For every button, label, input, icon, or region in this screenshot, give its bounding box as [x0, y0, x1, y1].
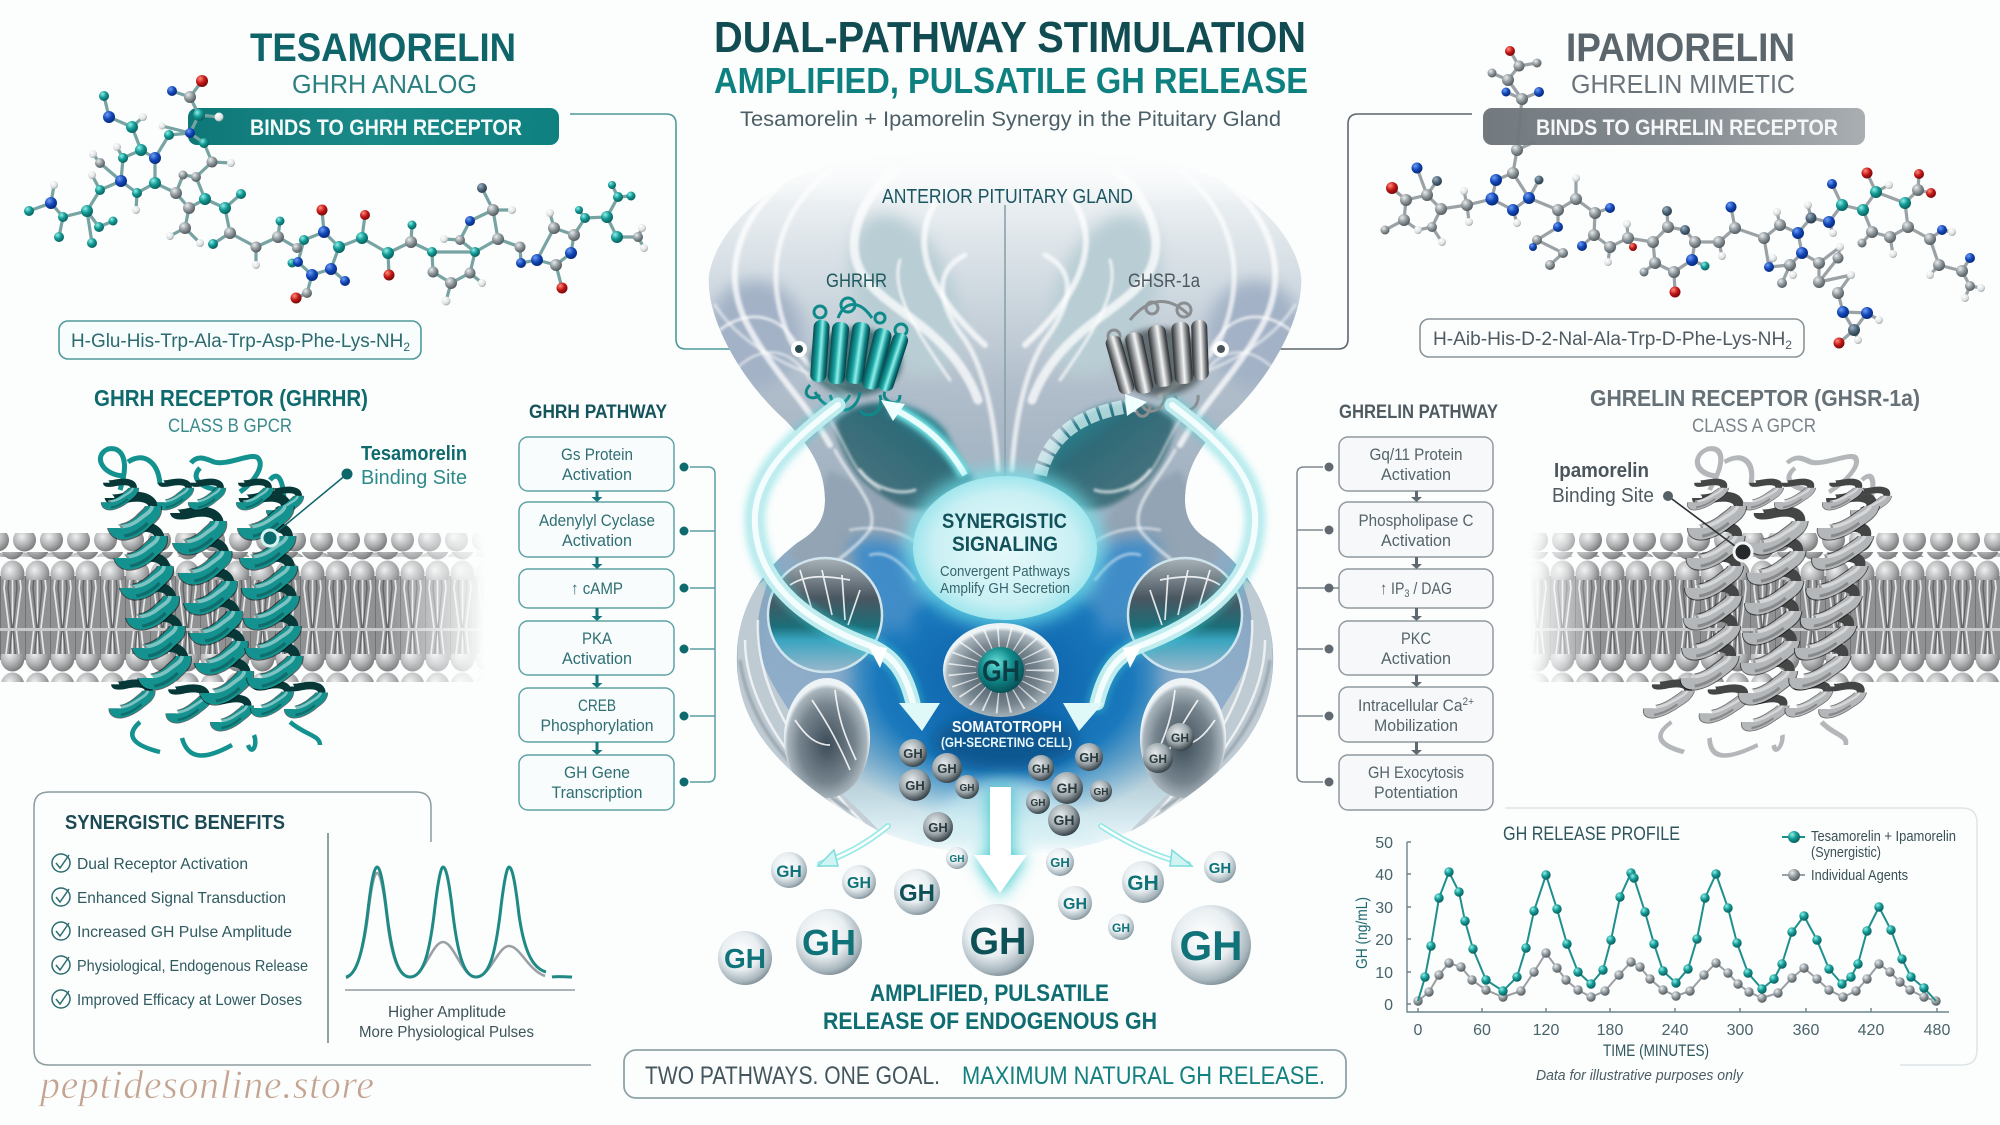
binds pill: BINDS TO GHRH RECEPTOR — [250, 115, 522, 140]
arrow: central release — [974, 787, 1027, 897]
heading: GHRH receptor: CLASS B GPCR — [168, 416, 292, 437]
y axis labels: 10 — [1375, 965, 1393, 982]
y axis labels: 30 — [1375, 900, 1393, 917]
legend — [1782, 828, 1956, 884]
x axis labels — [1414, 1022, 1950, 1039]
panel frame — [34, 792, 591, 1065]
ipamorelin name: IPAMORELIN — [1566, 26, 1795, 70]
legend: (Synergistic) — [1811, 844, 1881, 861]
heading: amplified release: AMPLIFIED, PULSATILE — [870, 980, 1109, 1007]
pathway labels: Activation — [1381, 531, 1451, 550]
panel: ipamorelin header — [1483, 26, 1865, 145]
benefits checklist: Improved Efficacy at Lower Doses — [77, 992, 302, 1009]
pathway labels: Gs Protein — [561, 445, 633, 464]
GH granules: inside gland: GH — [1056, 780, 1078, 796]
binds pill — [1483, 108, 1865, 145]
series: individual agents — [1413, 948, 1941, 1006]
GH granules: inside gland: GH — [1030, 798, 1046, 809]
GH granules: released: GH — [847, 875, 871, 892]
panel: tesamorelin header — [188, 26, 559, 145]
heading: ghrelin receptor — [1590, 385, 1920, 437]
pathway title: GHRELIN PATHWAY — [1339, 402, 1498, 423]
panel: ghrelin pathway — [1297, 402, 1498, 810]
pathway labels: ↑ cAMP — [571, 579, 623, 598]
pathway labels: 3 — [1404, 588, 1410, 600]
GH granules: released: GH — [1050, 855, 1070, 870]
heading: GHRH receptor: GHRH RECEPTOR (GHRHR) — [94, 385, 368, 411]
GH granules: released: GH — [776, 862, 802, 881]
chart panel — [1505, 808, 1977, 1065]
chart: GH release profile — [1354, 808, 1977, 1084]
GH granules: inside gland: GH — [1149, 752, 1167, 766]
marker: GHSR dot — [1215, 343, 1227, 355]
pulse caption: Higher Amplitude — [388, 1004, 506, 1021]
x axis labels: 120 — [1533, 1022, 1559, 1039]
legend: Tesamorelin + Ipamorelin — [1811, 828, 1956, 845]
x axis title: TIME (MINUTES) — [1603, 1041, 1709, 1060]
arrow: right signaling ring — [1097, 405, 1255, 703]
panel: GHRH pathway — [519, 402, 715, 810]
pathway labels — [539, 445, 655, 802]
divider — [327, 833, 329, 1043]
arrow: left splay — [818, 826, 888, 866]
membrane: left — [0, 533, 485, 682]
cell: somatotroph — [941, 623, 1072, 750]
pathway labels: Potentiation — [1374, 783, 1458, 802]
callout: ipamorelin binding site: Binding Site — [1552, 485, 1654, 507]
connector: tesamorelin to GHRHR — [570, 114, 790, 349]
callout: synergistic signaling — [905, 468, 1105, 628]
chart note: Data for illustrative purposes only — [1536, 1067, 1744, 1084]
x axis labels: 180 — [1597, 1022, 1623, 1039]
GH granules: inside gland: GH — [937, 761, 957, 776]
pathway labels: PKA — [582, 629, 613, 648]
x axis labels: 480 — [1924, 1022, 1950, 1039]
sequence: ipamorelin — [1420, 319, 1804, 357]
heading: amplified release — [823, 980, 1157, 1035]
y axis labels: 50 — [1375, 835, 1393, 852]
arrow: left signaling ring — [755, 405, 913, 703]
pathway labels: PKC — [1401, 629, 1431, 648]
title line 2: AMPLIFIED, PULSATILE GH RELEASE — [714, 60, 1308, 101]
GH granules: released: GH — [970, 921, 1026, 963]
GH granules: released: GH — [1127, 872, 1159, 895]
molecule: ipamorelin — [1380, 46, 1985, 348]
pulse chart — [345, 867, 575, 990]
benefits checklist — [52, 854, 308, 1009]
cell: somatotroph: GH — [982, 655, 1020, 688]
pathway labels: Adenylyl Cyclase — [539, 511, 655, 530]
benefits heading: SYNERGISTIC BENEFITS — [65, 812, 285, 834]
pathway labels: 2+ — [1463, 696, 1474, 708]
GH granules: released: GH — [1063, 896, 1087, 913]
dots — [1324, 462, 1334, 786]
banner: two pathways: MAXIMUM NATURAL GH RELEASE. — [962, 1062, 1325, 1090]
pathway labels: Phosphorylation — [540, 716, 654, 735]
callout: tesamorelin binding site — [262, 443, 467, 546]
GH granules: inside gland: GH — [1079, 750, 1099, 765]
GH granules: inside gland: GH — [1032, 762, 1050, 776]
tesamorelin class: GHRH ANALOG — [292, 69, 477, 99]
arrow: right splay — [1101, 826, 1192, 866]
bracket — [690, 467, 715, 782]
arrow: down arrowheads — [868, 645, 1142, 731]
marker: GHRHR dot — [793, 343, 805, 355]
bracket — [1297, 467, 1339, 782]
sequence: tesamorelin: H-Glu-His-Trp-Ala-Trp-Asp-Phe-Lys-NH — [71, 331, 405, 352]
GH granules: inside gland: GH — [905, 778, 925, 793]
benefits checklist: Dual Receptor Activation — [77, 856, 248, 873]
benefits checklist: Physiological, Endogenous Release — [77, 958, 308, 975]
illustration: pituitary gland — [708, 188, 1302, 851]
main title — [714, 13, 1308, 131]
callout: synergistic signaling: Convergent Pathways — [940, 564, 1070, 580]
callout: synergistic signaling: Amplify GH Secretion — [940, 581, 1070, 597]
pathway labels: Phospholipase C — [1358, 511, 1474, 530]
y axis labels — [1375, 835, 1393, 1014]
banner: two pathways: TWO PATHWAYS. ONE GOAL. — [645, 1062, 940, 1090]
heading: GHRH receptor — [94, 385, 368, 437]
pathway labels: GH Gene — [564, 763, 630, 782]
axes — [1407, 842, 1949, 1012]
pathway labels: CREB — [578, 696, 616, 715]
GH granules: released: GH — [802, 922, 856, 963]
sequence: ipamorelin: H-Aib-His-D-2-Nal-Ala-Trp-D-Phe-Lys-NH — [1433, 329, 1783, 350]
pathway labels — [1358, 445, 1474, 802]
pathway arrows — [592, 491, 602, 755]
GH granules: inside gland: GH — [1094, 787, 1108, 798]
series: synergistic — [1418, 867, 1936, 1001]
pathway title: GHRH PATHWAY — [529, 402, 667, 423]
sequence: ipamorelin: 2 — [1785, 338, 1792, 352]
pathway labels: Activation — [562, 531, 632, 550]
GH granules: inside gland: GH — [928, 820, 948, 835]
GH granules: inside gland: GH — [960, 783, 974, 794]
GH granules: released: GH — [1180, 922, 1242, 969]
pathway labels: Transcription — [552, 783, 642, 802]
pathway labels: Activation — [562, 649, 632, 668]
tesamorelin name: TESAMORELIN — [250, 26, 516, 70]
heading: ghrelin receptor: CLASS A GPCR — [1692, 416, 1816, 437]
x axis labels: 360 — [1793, 1022, 1819, 1039]
x axis labels: 240 — [1662, 1022, 1688, 1039]
callout: synergistic signaling: SIGNALING — [952, 533, 1058, 556]
legend: Individual Agents — [1811, 867, 1908, 884]
GH granules: released: GH — [1112, 921, 1130, 935]
GH granules: released: GH — [724, 943, 766, 974]
heading: ghrelin receptor: GHRELIN RECEPTOR (GHSR-1a) — [1590, 385, 1920, 411]
pathway labels: Intracellular Ca — [1358, 696, 1472, 715]
GH granules: inside gland: GH — [1054, 812, 1074, 828]
connector: ipamorelin to GHSR-1a — [1230, 114, 1472, 349]
cell: somatotroph: (GH-SECRETING CELL) — [941, 734, 1072, 750]
callout: ipamorelin binding site: Ipamorelin — [1554, 460, 1649, 482]
pathway labels: ↑ IP — [1380, 579, 1409, 598]
chart title: GH RELEASE PROFILE — [1503, 824, 1680, 845]
ipamorelin class: GHRELIN MIMETIC — [1571, 69, 1795, 99]
binds pill: BINDS TO GHRELIN RECEPTOR — [1536, 115, 1838, 140]
binds pill — [188, 108, 559, 145]
subtitle: Tesamorelin + Ipamorelin Synergy in the Pituitary Gland — [740, 108, 1281, 131]
label: GHSR-1a: GHSR-1a — [1128, 271, 1200, 292]
pathway labels: Mobilization — [1374, 716, 1458, 735]
pathway labels: Activation — [1381, 649, 1451, 668]
y axis title: GH (ng/mL) — [1354, 897, 1371, 969]
GH granules: released: GH — [1209, 860, 1231, 877]
GH granules: released — [718, 847, 1251, 985]
receptor: GHRHR in gland — [806, 298, 910, 415]
receptor: GHSR-1a in gland — [1104, 301, 1209, 416]
pathway boxes — [1339, 437, 1493, 810]
pulse caption: More Physiological Pulses — [359, 1024, 534, 1041]
sequence: tesamorelin: 2 — [403, 340, 410, 354]
main title: DUAL-PATHWAY STIMULATION — [714, 13, 1306, 62]
GH granules: inside gland: GH — [903, 746, 923, 761]
arrow: inner returns to receptors — [881, 394, 1147, 475]
callout: synergistic signaling: SYNERGISTIC — [942, 510, 1067, 533]
callout: tesamorelin binding site: Tesamorelin — [361, 443, 467, 465]
x axis labels: 420 — [1858, 1022, 1884, 1039]
label: GHRHR: GHRHR — [826, 271, 887, 292]
benefits checklist: Increased GH Pulse Amplitude — [77, 924, 292, 941]
pathway labels: Gq/11 Protein — [1370, 445, 1462, 464]
dots — [680, 462, 688, 786]
watermark: peptidesonline.store — [37, 1062, 374, 1107]
y axis labels: 0 — [1384, 997, 1393, 1014]
callout: ipamorelin binding site — [1552, 460, 1752, 561]
x axis labels: 0 — [1414, 1022, 1423, 1039]
panel: synergistic benefits — [34, 792, 591, 1065]
label: anterior pituitary: ANTERIOR PITUITARY GLAND — [882, 186, 1133, 208]
heading: amplified release: RELEASE OF ENDOGENOUS GH — [823, 1008, 1157, 1035]
y axis labels: 40 — [1375, 867, 1393, 884]
GH granules: inside gland — [899, 723, 1194, 842]
benefits checklist: Enhanced Signal Transduction — [77, 890, 286, 907]
pathway labels: / DAG — [1410, 579, 1452, 598]
molecule: tesamorelin — [24, 75, 648, 306]
membrane: right — [1530, 533, 2000, 682]
pathway boxes — [519, 437, 674, 810]
receptor: GHSR-1a ribbon — [1624, 449, 1922, 755]
GH granules: released: GH — [899, 880, 935, 907]
pathway labels: GH Exocytosis — [1368, 763, 1464, 782]
banner: two pathways — [624, 1050, 1346, 1098]
GH granules: released: GH — [950, 854, 964, 865]
x axis labels: 60 — [1473, 1022, 1491, 1039]
cell: somatotroph: SOMATOTROPH — [952, 719, 1062, 736]
callout: tesamorelin binding site: Binding Site — [361, 467, 467, 489]
pathway labels: Activation — [1381, 465, 1451, 484]
pulse caption — [359, 1004, 534, 1041]
sequence: tesamorelin — [59, 321, 421, 359]
y axis labels: 20 — [1375, 932, 1393, 949]
x axis labels: 300 — [1727, 1022, 1753, 1039]
GH granules: inside gland: GH — [1171, 731, 1189, 745]
pathway labels: Activation — [562, 465, 632, 484]
receptor: GHRHR ribbon — [100, 449, 322, 755]
pathway arrows — [1411, 491, 1422, 755]
